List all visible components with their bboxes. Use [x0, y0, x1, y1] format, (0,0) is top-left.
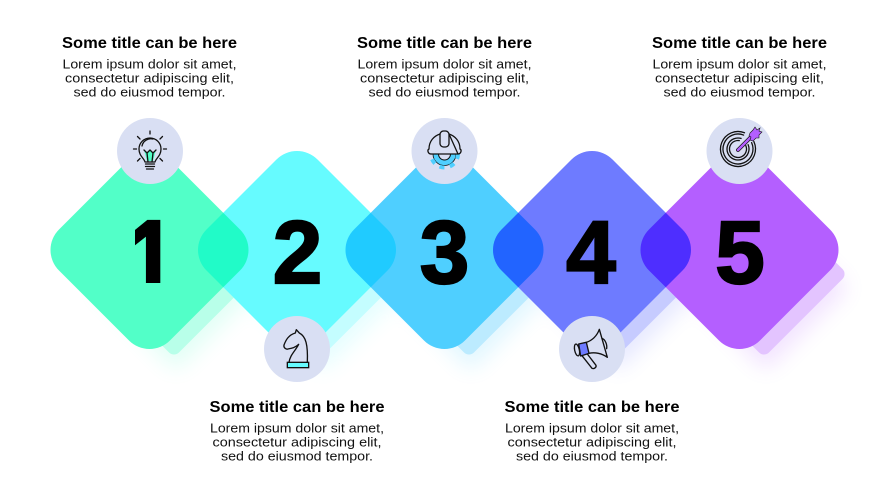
text block 1: Some title can be here	[62, 35, 237, 52]
infographic: five overlapping diamonds	[50, 36, 847, 463]
text block 3: Lorem ipsum dolor sit amet,	[358, 58, 532, 72]
text block 1: Lorem ipsum dolor sit amet,	[62, 58, 237, 72]
text block 1	[62, 35, 237, 100]
text block 5: consectetur adipiscing elit,	[655, 72, 824, 86]
text block 3	[357, 35, 532, 100]
text block 3: consectetur adipiscing elit,	[360, 72, 529, 86]
number 5: 5	[715, 202, 765, 302]
text block 4: Some title can be here	[504, 399, 680, 416]
text block 5: Lorem ipsum dolor sit amet,	[652, 58, 826, 72]
number 3: 3	[420, 202, 469, 302]
text block 5	[652, 35, 827, 100]
text block 5: Some title can be here	[652, 35, 827, 52]
icon: hard hat with gear	[412, 118, 478, 184]
icon: light bulb	[117, 118, 183, 184]
text block 4: sed do eiusmod tempor.	[516, 450, 668, 464]
text block 3: Some title can be here	[357, 35, 532, 52]
diamond 5	[628, 139, 851, 361]
text block 5: sed do eiusmod tempor.	[664, 86, 816, 100]
soft shadows below diamonds	[91, 191, 849, 371]
text block 4: consectetur adipiscing elit,	[508, 436, 676, 450]
text block 4: Lorem ipsum dolor sit amet,	[505, 422, 679, 436]
text block 1: consectetur adipiscing elit,	[65, 72, 234, 86]
text block 3: sed do eiusmod tempor.	[368, 86, 520, 100]
text block 2: sed do eiusmod tempor.	[221, 450, 373, 464]
number 2: 2	[273, 202, 322, 302]
text block 2: consectetur adipiscing elit,	[212, 436, 382, 450]
diamond 3	[333, 139, 556, 361]
text block 2: Lorem ipsum dolor sit amet,	[210, 422, 384, 436]
diamond 4	[481, 139, 703, 361]
diamond 1	[38, 139, 261, 361]
icon: megaphone	[559, 316, 625, 382]
text block 2	[210, 399, 385, 464]
white backing for diamonds	[38, 139, 851, 361]
number 4: 4	[566, 202, 616, 302]
icon: target with arrow	[706, 118, 772, 184]
diamond 2	[186, 139, 408, 361]
icon: chess knight	[264, 316, 330, 382]
text block 2: Some title can be here	[210, 399, 385, 416]
text block 4	[504, 399, 680, 464]
number 1: 1	[126, 199, 176, 322]
text block 1: sed do eiusmod tempor.	[74, 86, 226, 100]
